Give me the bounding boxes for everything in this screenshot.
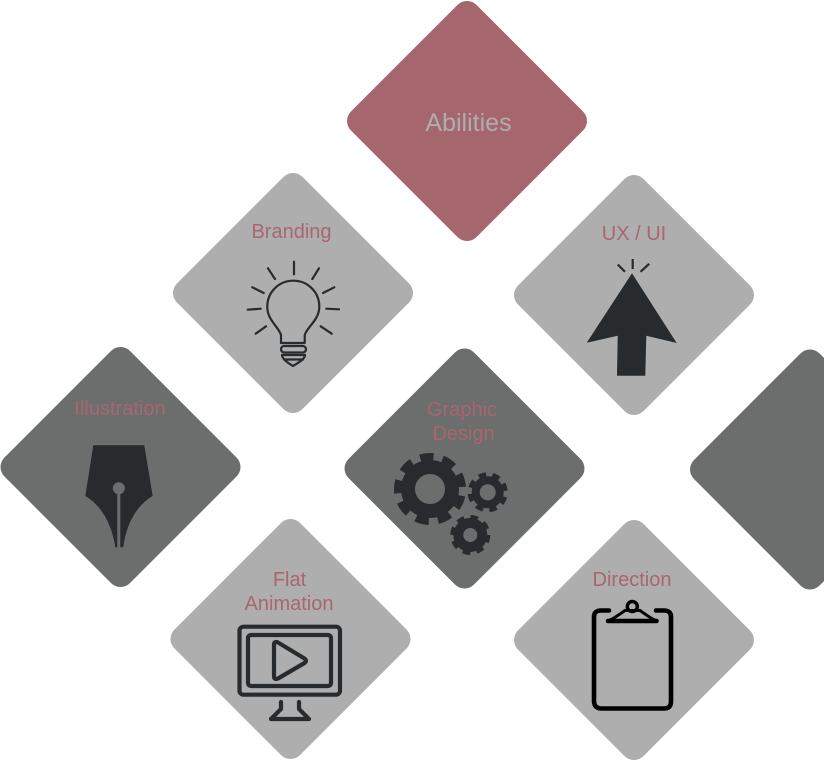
panel: Direction [508,514,760,761]
label: Illustration: Illustration [74,398,166,420]
label: Branding: Branding [251,221,332,243]
panel: Graphic Design [339,343,590,594]
panel: Abilities [341,0,593,247]
panel: UX / UI [508,169,760,421]
panel: Branding [167,167,419,419]
label: UX / UI: UX / UI [602,223,666,245]
icon: clipboard [594,602,671,708]
icon: light bulb [248,262,339,366]
label: Graphic Design: Design [432,423,495,445]
icon: cursor arrow [587,259,677,376]
panel: Illustration [0,341,246,593]
icon: video monitor [240,627,340,719]
heading: Abilities: Abilities [425,109,512,137]
label: Flat Animation: Animation [245,593,333,615]
panel: Flat Animation [165,513,416,761]
label: Graphic Design: Graphic [427,399,497,421]
panel: unlabeled right diamond [684,344,824,595]
label: Direction: Direction [593,569,671,591]
icon: gears [393,452,509,552]
label: Flat Animation: Flat [273,569,307,591]
icon: pen nib [85,445,153,548]
